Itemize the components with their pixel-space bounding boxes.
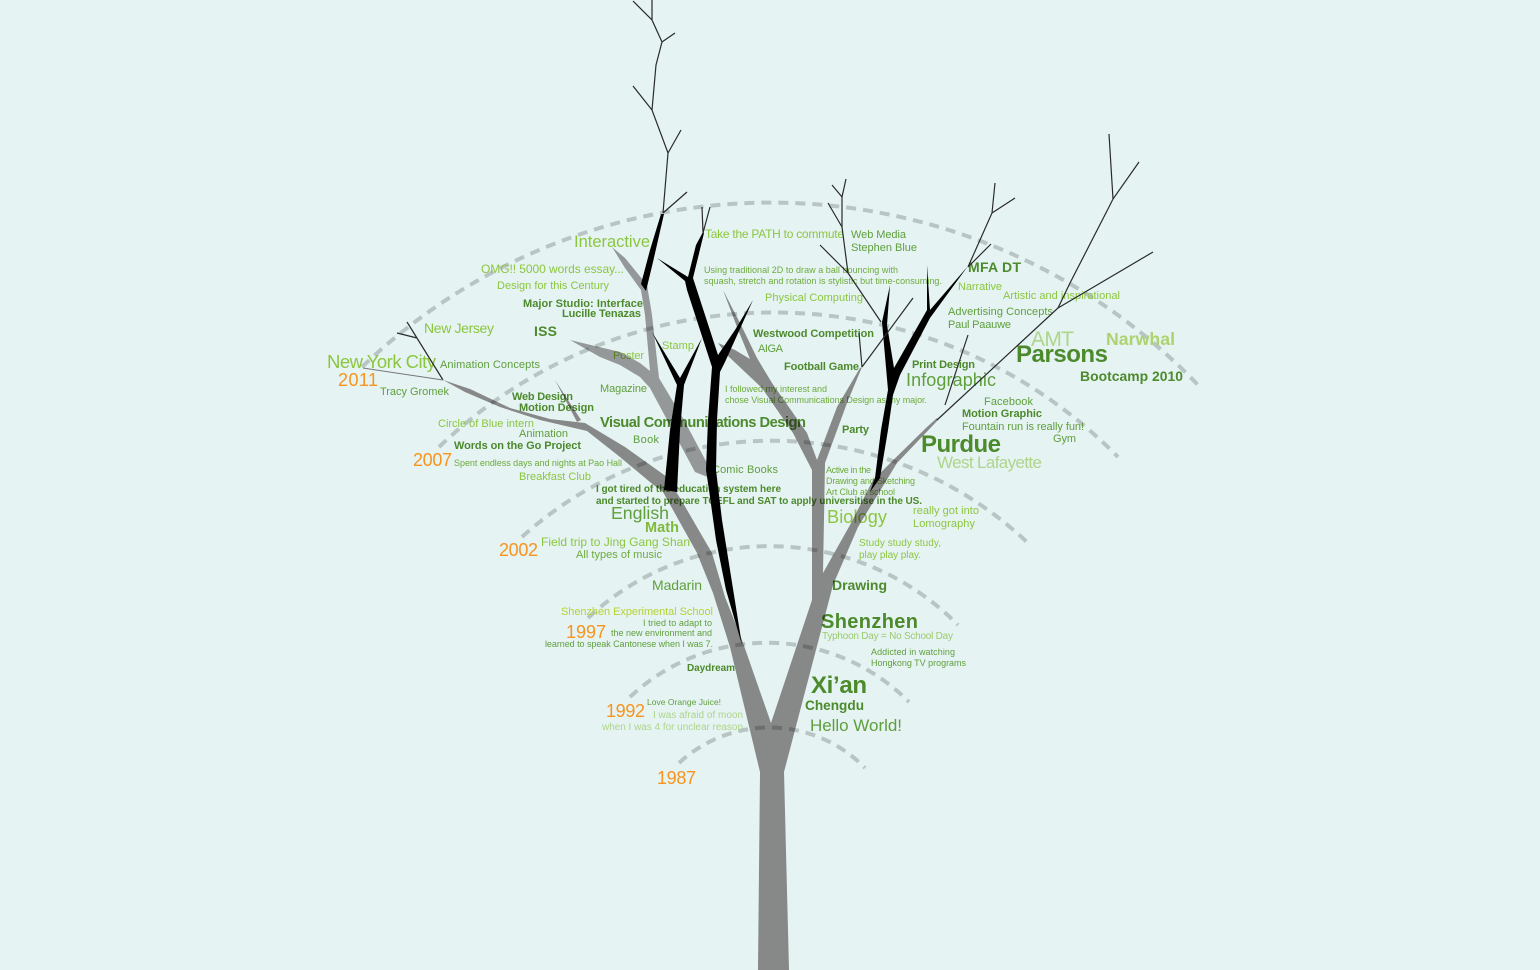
label: Math: Math [645, 520, 679, 536]
arc: 1987 [679, 728, 865, 768]
label: Parsons: Parsons [1016, 341, 1108, 368]
label: Westwood Competition: Westwood Competition [753, 328, 874, 340]
label: Web Media: Web Media [851, 229, 907, 241]
note: adapt line three: learned to speak Cantonese when I was 7. [545, 639, 713, 649]
label: Football Game: Football Game [784, 361, 859, 373]
branch: center black [657, 232, 753, 645]
note: study study: Study study study, [859, 538, 941, 549]
note: unclear reason: when I was 4 for unclear reason [601, 722, 743, 733]
trunk and lower left branch with right limbs [443, 290, 938, 970]
twigs: right black crown [968, 183, 1015, 267]
year: 2007: 2007 [413, 450, 452, 470]
label: Words on the Go Project: Words on the Go Project [454, 440, 581, 452]
label: Breakfast Club: Breakfast Club [519, 471, 591, 483]
note: afraid of moon: I was afraid of moon [653, 710, 743, 721]
arc: 2002 [522, 441, 1030, 545]
label: Infographic: Infographic [906, 370, 996, 390]
label: Biology: Biology [827, 507, 888, 527]
label: Major Studio: Major Studio: Interface [523, 298, 643, 310]
note: adapt line two: the new environment and [611, 628, 712, 638]
label: Purdue: Purdue [921, 431, 1001, 458]
label: Narwhal: Narwhal [1106, 329, 1175, 349]
label: Motion Design: Motion Design [519, 402, 594, 414]
black tree branches [641, 214, 968, 645]
note: adapt line one: I tried to adapt to [643, 618, 712, 628]
label: AIGA: AIGA [758, 343, 784, 355]
year: 2011: 2011 [338, 370, 378, 390]
arc: 1997 [588, 546, 958, 625]
label: Advertising Concepts: Advertising Concepts [948, 306, 1054, 318]
label: Print Design: Print Design [912, 359, 975, 371]
note: Love Orange Juice: Love Orange Juice! [647, 697, 721, 707]
label: Stamp: Stamp [662, 340, 694, 352]
label: Magazine: Magazine [600, 383, 647, 395]
year: 1992: 1992 [606, 701, 645, 721]
note: tired of education: I got tired of the education system here [596, 484, 781, 495]
label: Madarin: Madarin [652, 577, 702, 593]
twigs: far right crown [937, 134, 1153, 420]
label: Poster: Poster [613, 350, 644, 362]
label: Comic Books: Comic Books [712, 464, 778, 476]
label: Xi'an: Xi’an [811, 672, 867, 699]
label: Physical Computing: Physical Computing [765, 292, 863, 304]
label: Facebook: Facebook [984, 396, 1034, 408]
label: AMT: AMT [1031, 328, 1074, 351]
grey tree trunk and branches [443, 247, 938, 970]
arc: 2011 [362, 203, 1198, 385]
dashed year arcs [362, 203, 1198, 768]
label: Visual Communications Design: Visual Communications Design [600, 415, 806, 431]
twigs: top crown [633, 0, 710, 233]
label: Shenzhen Experimental School: Shenzhen Experimental School [561, 606, 713, 618]
text cluster: high school years [499, 465, 979, 561]
twigs: center right crown [820, 179, 913, 367]
label: English: English [611, 503, 669, 523]
label: Hello World: Hello World! [810, 716, 902, 735]
arc: 1992 [630, 643, 909, 702]
note: Pao Hall: Spent endless days and nights at Pao Hall [454, 458, 622, 468]
label: Fountain run: Fountain run is really fun! [962, 421, 1084, 433]
note: Drawing and Sketching: Drawing and Sketching [826, 476, 915, 486]
label: MFA DT: MFA DT [968, 259, 1021, 275]
label: Interactive: Interactive [574, 233, 650, 251]
note: Hongkong TV programs: Hongkong TV programs [871, 658, 966, 668]
twigs: New York crown [397, 322, 443, 380]
note: Addicted in watching: Addicted in watching [871, 647, 955, 657]
label: New York City: New York City [327, 351, 437, 372]
label: PATH commute: Take the PATH to commute [705, 227, 844, 241]
label: essay note: OMG!! 5000 words essay... [481, 262, 624, 276]
text cluster: New York years [327, 227, 1183, 398]
label: Daydream: Daydream [687, 663, 735, 674]
label: Animation Concepts: Animation Concepts [440, 359, 540, 371]
label: Design for this Century: Design for this Century [497, 280, 610, 292]
note: play play: play play play. [859, 550, 921, 561]
label: Narrative: Narrative [958, 281, 1002, 293]
small twig on lower left branch [555, 380, 581, 422]
note: Art Club at school: Art Club at school [826, 487, 895, 497]
note: TOEFL and SAT: and started to prepare TOEFL and SAT to apply universitise in the US. [596, 496, 922, 507]
label: Lucille Tenazas: Lucille Tenazas [562, 308, 641, 320]
label: Tracy Gromek: Tracy Gromek [380, 386, 450, 398]
label: Drawing: Drawing [832, 577, 887, 593]
label: Web Design: Web Design [512, 391, 573, 403]
label: Lomography: Lomography [913, 518, 976, 530]
label: Artistic and inspirational: Artistic and inspirational [1003, 290, 1120, 302]
label: New Jersey: New Jersey [424, 320, 494, 336]
label: ISS: ISS [534, 323, 557, 339]
text cluster: Purdue years [413, 328, 1084, 483]
branch: left black [652, 332, 702, 492]
label: Shenzhen: Shenzhen [821, 611, 918, 633]
label: Bootcamp 2010: Bootcamp 2010 [1080, 368, 1183, 384]
label: really got into: really got into [913, 505, 979, 517]
thin twigs [363, 0, 1153, 420]
note: traditional 2D line one: Using traditional 2D to draw a ball bouncing with [704, 265, 898, 275]
label: All types of music: All types of music [576, 549, 662, 561]
year: 1997: 1997 [566, 622, 606, 642]
label: Typhoon Day: Typhoon Day = No School Day [822, 631, 953, 642]
note: followed interest line one: I followed my interest and [725, 384, 827, 394]
note: traditional 2D line two: squash, stretch and rotation is stylistic but time-consuming. [704, 276, 942, 286]
label: Motion Graphic: Motion Graphic [962, 408, 1042, 420]
label: Field trip: Field trip to Jing Gang Shan [541, 535, 690, 549]
label: Stephen Blue: Stephen Blue [851, 242, 917, 254]
label: Party: Party [842, 424, 870, 436]
arc: 2007 [439, 312, 1118, 457]
branch: upper left black [641, 214, 664, 291]
label: Chengdu: Chengdu [805, 698, 864, 713]
label: Gym: Gym [1053, 433, 1076, 445]
text cluster: Shenzhen years [545, 577, 966, 674]
label: Circle of Blue intern: Circle of Blue intern [438, 418, 534, 430]
label: Paul Paauwe: Paul Paauwe [948, 319, 1011, 331]
year: 2002: 2002 [499, 540, 538, 560]
twig: New York City branch [363, 368, 443, 380]
upper left branch [570, 247, 710, 478]
label: Animation: Animation [519, 428, 568, 440]
branch: right black [870, 265, 968, 492]
label: West Lafayette: West Lafayette [937, 453, 1042, 472]
label: Book: Book [633, 434, 660, 446]
text cluster: early years [601, 672, 902, 788]
note: Active in the: Active in the [826, 465, 871, 475]
year: 1987: 1987 [657, 768, 696, 788]
note: followed interest line two: chose Visual Communications Design as my major. [725, 395, 927, 405]
